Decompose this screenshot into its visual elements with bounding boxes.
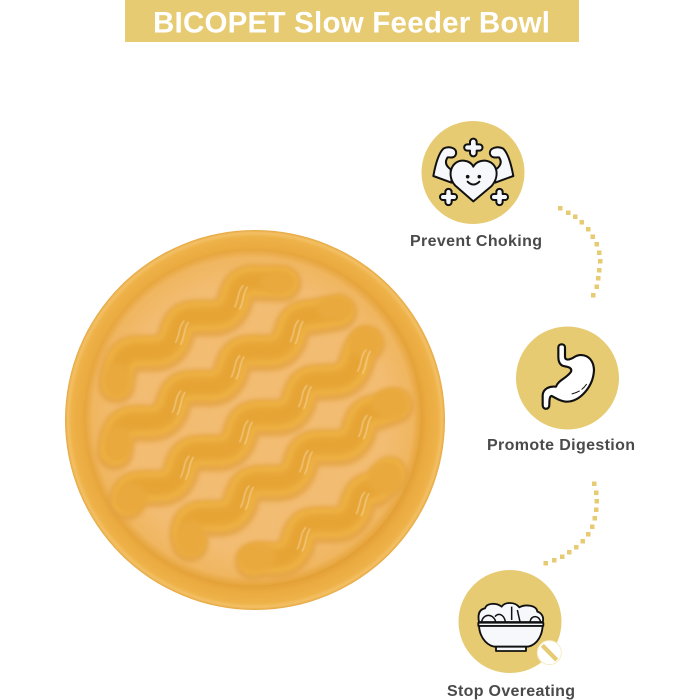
slow feeder bowl xyxy=(65,230,445,610)
wave highlights xyxy=(172,286,371,551)
dotted arc upper xyxy=(558,206,602,298)
dotted arc lower xyxy=(544,482,599,566)
wave ridges xyxy=(115,281,395,562)
label: Promote Digestion xyxy=(487,437,635,454)
benefit: promote digestion xyxy=(487,326,635,454)
label: Prevent Choking xyxy=(410,233,542,250)
label: Stop Overeating xyxy=(447,683,575,700)
benefit: prevent choking xyxy=(410,121,542,250)
icon circle xyxy=(422,121,524,224)
bowl rim xyxy=(65,230,445,610)
title banner xyxy=(125,0,579,42)
icon circle xyxy=(458,570,562,673)
icon circle xyxy=(516,326,619,430)
bowl floor xyxy=(84,249,421,586)
icon: heart with muscles xyxy=(433,139,513,205)
icon: stomach xyxy=(543,344,594,409)
title: BICOPET Slow Feeder Bowl xyxy=(153,6,550,40)
benefit: stop overeating xyxy=(447,570,575,700)
wave end blobs xyxy=(105,271,408,571)
icon: food bowl xyxy=(478,603,543,651)
icon: no sign xyxy=(537,641,561,665)
